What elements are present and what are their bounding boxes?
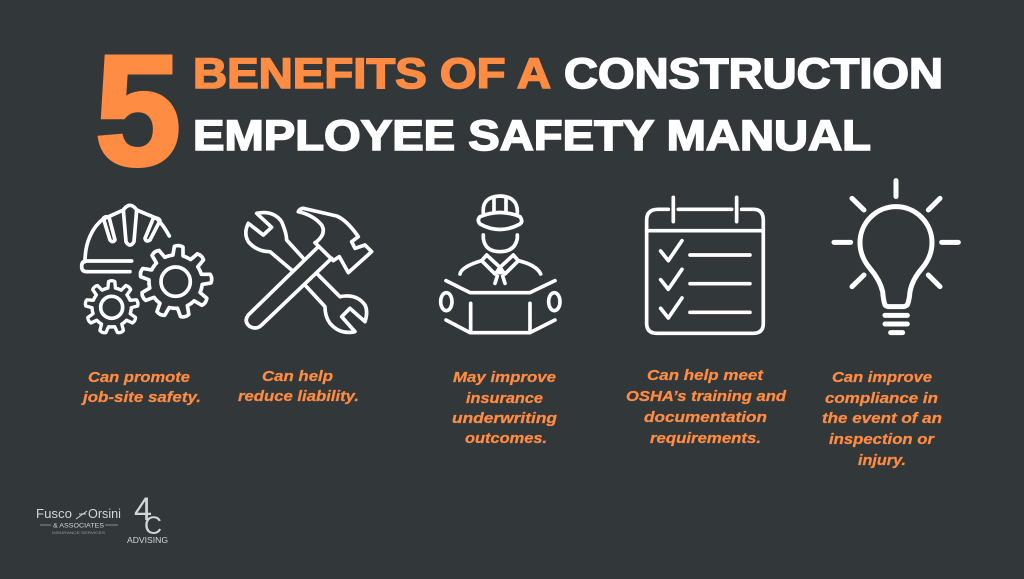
logo: 4C Advising: C (144, 512, 162, 540)
caption: compliance (822, 369, 942, 469)
logo: Fusco Orsini and Associates: INSURANCE SERVICES (52, 530, 105, 535)
icon: calendar checklist (647, 197, 763, 333)
icon: wrench and hammer (246, 208, 372, 332)
icon: hard hat and gears (82, 205, 213, 335)
caption: OSHA requirements: documentation (644, 409, 767, 426)
logo: 4C Advising (127, 491, 168, 545)
title line 2: EMPLOYEE SAFETY MANUAL (193, 113, 871, 160)
caption: reduce liability (238, 368, 359, 405)
title line 1 orange: BENEFITS OF A (193, 51, 551, 98)
caption: OSHA requirements (626, 367, 787, 447)
caption: insurance underwriting: insurance (466, 390, 543, 407)
caption: job-site safety (81, 369, 201, 406)
logo: Fusco Orsini and Associates (36, 507, 121, 535)
caption: job-site safety: job-site safety. (81, 389, 201, 406)
caption: reduce liability: reduce liability. (238, 388, 359, 405)
logo: 4C Advising: ADVISING (127, 535, 168, 545)
title numeral 5: 5 (95, 24, 181, 198)
logo: 4C Advising: 4 (134, 491, 152, 527)
caption: compliance: compliance in (825, 390, 938, 407)
caption: OSHA requirements: OSHA’s training and (626, 388, 787, 405)
caption: compliance: Can improve (832, 369, 932, 386)
caption: reduce liability: Can help (262, 368, 333, 385)
title (95, 24, 943, 198)
icon: worker reading blueprint (441, 196, 560, 333)
logo: Fusco Orsini and Associates: & ASSOCIATES (53, 522, 105, 530)
caption: OSHA requirements: requirements. (650, 430, 761, 447)
caption: compliance: the event of an (822, 410, 942, 427)
caption: OSHA requirements: Can help meet (647, 367, 764, 384)
caption: insurance underwriting: underwriting (452, 410, 557, 427)
logo: Fusco Orsini and Associates: Orsini (88, 507, 121, 521)
caption: insurance underwriting: May improve (453, 369, 556, 386)
caption: insurance underwriting: outcomes. (465, 430, 547, 447)
icon: light bulb (834, 181, 958, 333)
caption: insurance underwriting (452, 369, 557, 447)
logo: Fusco Orsini and Associates: Fusco (36, 507, 72, 521)
title line 1 white: CONSTRUCTION (564, 51, 943, 98)
caption: compliance: injury. (858, 452, 906, 469)
caption: compliance: inspection or (829, 431, 935, 448)
caption: job-site safety: Can promote (88, 369, 190, 386)
